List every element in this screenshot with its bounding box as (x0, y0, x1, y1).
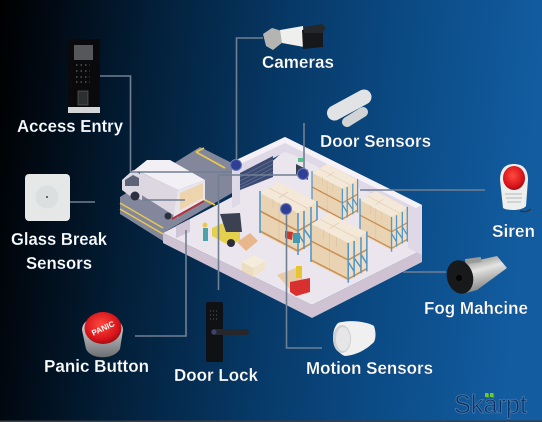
icon: camera (263, 24, 326, 50)
label: access entry: Access Entry (17, 116, 123, 136)
label: glass break sensors: Sensors (26, 253, 92, 273)
workers and floor boxes (202, 222, 310, 296)
storage racks with boxes (260, 164, 407, 283)
icon: motion sensor (333, 321, 376, 356)
warehouse illustration (120, 137, 422, 318)
icon: siren (500, 164, 531, 212)
sensor markers (230, 160, 308, 214)
forklift (212, 213, 258, 251)
icon: door sensor (334, 97, 364, 122)
road and loading bay (120, 147, 232, 241)
icon: access entry keypad (68, 39, 100, 113)
logo: Skarpt: Skärpt (454, 389, 528, 419)
label: cameras: Cameras (262, 52, 334, 72)
label: fog machine: Fog Mahcine (424, 298, 528, 318)
label: door lock: Door Lock (174, 365, 258, 385)
label: siren: Siren (492, 221, 535, 241)
icon: fog machine (443, 256, 507, 297)
icon: panic button: PANIC (90, 319, 116, 338)
building floor and walls (163, 137, 422, 318)
icon: panic button (82, 312, 123, 357)
icon: door lock (206, 302, 249, 362)
label: motion sensors: Motion Sensors (306, 358, 433, 378)
icon: glass break sensor (25, 174, 70, 221)
label: door sensors: Door Sensors (320, 131, 431, 151)
label: panic button: Panic Button (44, 356, 149, 376)
label: glass break sensors: Glass Break (11, 229, 107, 249)
connector lines (70, 38, 485, 348)
truck (122, 160, 205, 220)
